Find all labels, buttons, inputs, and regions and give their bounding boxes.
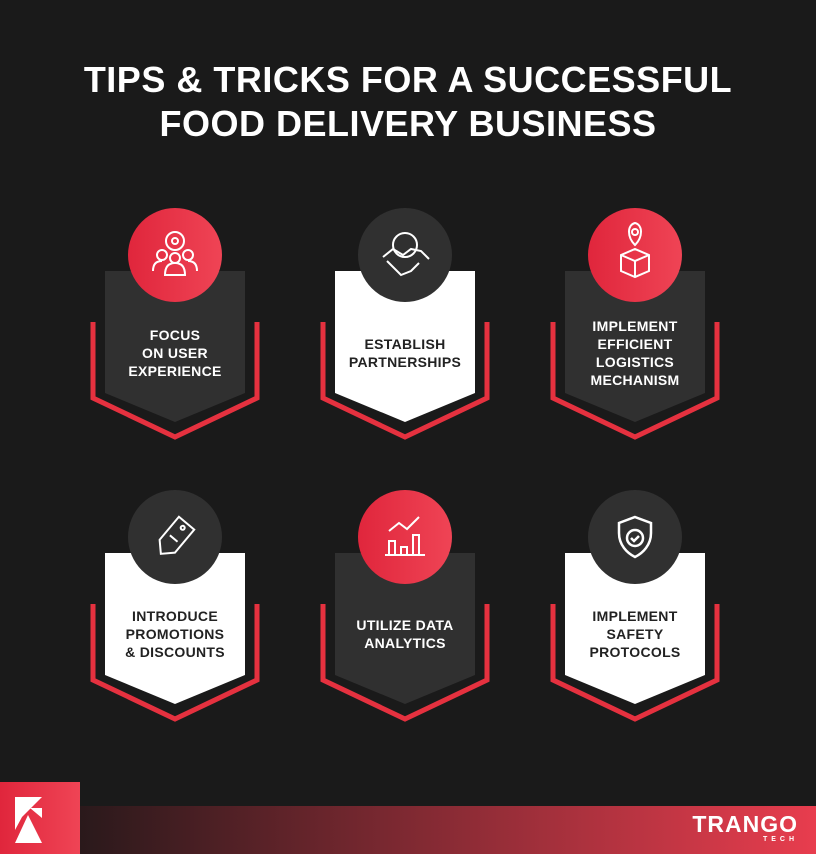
footer logo square: [0, 782, 80, 854]
card 4: promotions: [93, 490, 257, 719]
label 4: INTRODUCE: [132, 608, 218, 624]
label 6: SAFETY: [606, 626, 664, 642]
label 3: IMPLEMENT: [592, 318, 678, 334]
title: FOOD DELIVERY BUSINESS: [159, 103, 657, 144]
brand logo text: TECH: [763, 836, 798, 843]
label 3: EFFICIENT: [597, 336, 673, 352]
label 5: UTILIZE DATA: [356, 617, 454, 633]
label 2: [349, 336, 461, 370]
label 1: EXPERIENCE: [128, 363, 222, 379]
card 2: establish partnerships: [323, 208, 487, 437]
label 4: PROMOTIONS: [126, 626, 224, 642]
icon: shield check: [619, 517, 651, 557]
icon: chart: [385, 517, 425, 555]
icon: tag: [153, 517, 194, 560]
label 2: ESTABLISH: [364, 336, 446, 352]
icon: handshake gear: [383, 233, 429, 275]
label 2: PARTNERSHIPS: [349, 354, 461, 370]
label 6: IMPLEMENT: [592, 608, 678, 624]
title: [84, 59, 732, 144]
label 5: ANALYTICS: [364, 635, 446, 651]
icon: users target: [153, 232, 197, 275]
title: TIPS & TRICKS FOR A SUCCESSFUL: [84, 59, 732, 100]
label 3: [590, 318, 680, 388]
label 1: FOCUS: [150, 327, 200, 343]
card 3: logistics: [553, 208, 717, 437]
label 6: [589, 608, 681, 660]
card 5: data analytics: [323, 490, 487, 719]
icon: location box: [621, 223, 649, 277]
label 5: [356, 617, 454, 651]
label 4: [125, 608, 225, 660]
brand logo text: TRANGO: [692, 811, 798, 837]
label 3: MECHANISM: [590, 372, 680, 388]
footer bar: [80, 806, 816, 854]
label 4: & DISCOUNTS: [125, 644, 225, 660]
label 1: ON USER: [142, 345, 208, 361]
card 1: focus on user experience: [93, 208, 257, 437]
card 6: safety protocols: [553, 490, 717, 719]
label 3: LOGISTICS: [596, 354, 674, 370]
label 1: [128, 327, 222, 379]
label 6: PROTOCOLS: [589, 644, 681, 660]
